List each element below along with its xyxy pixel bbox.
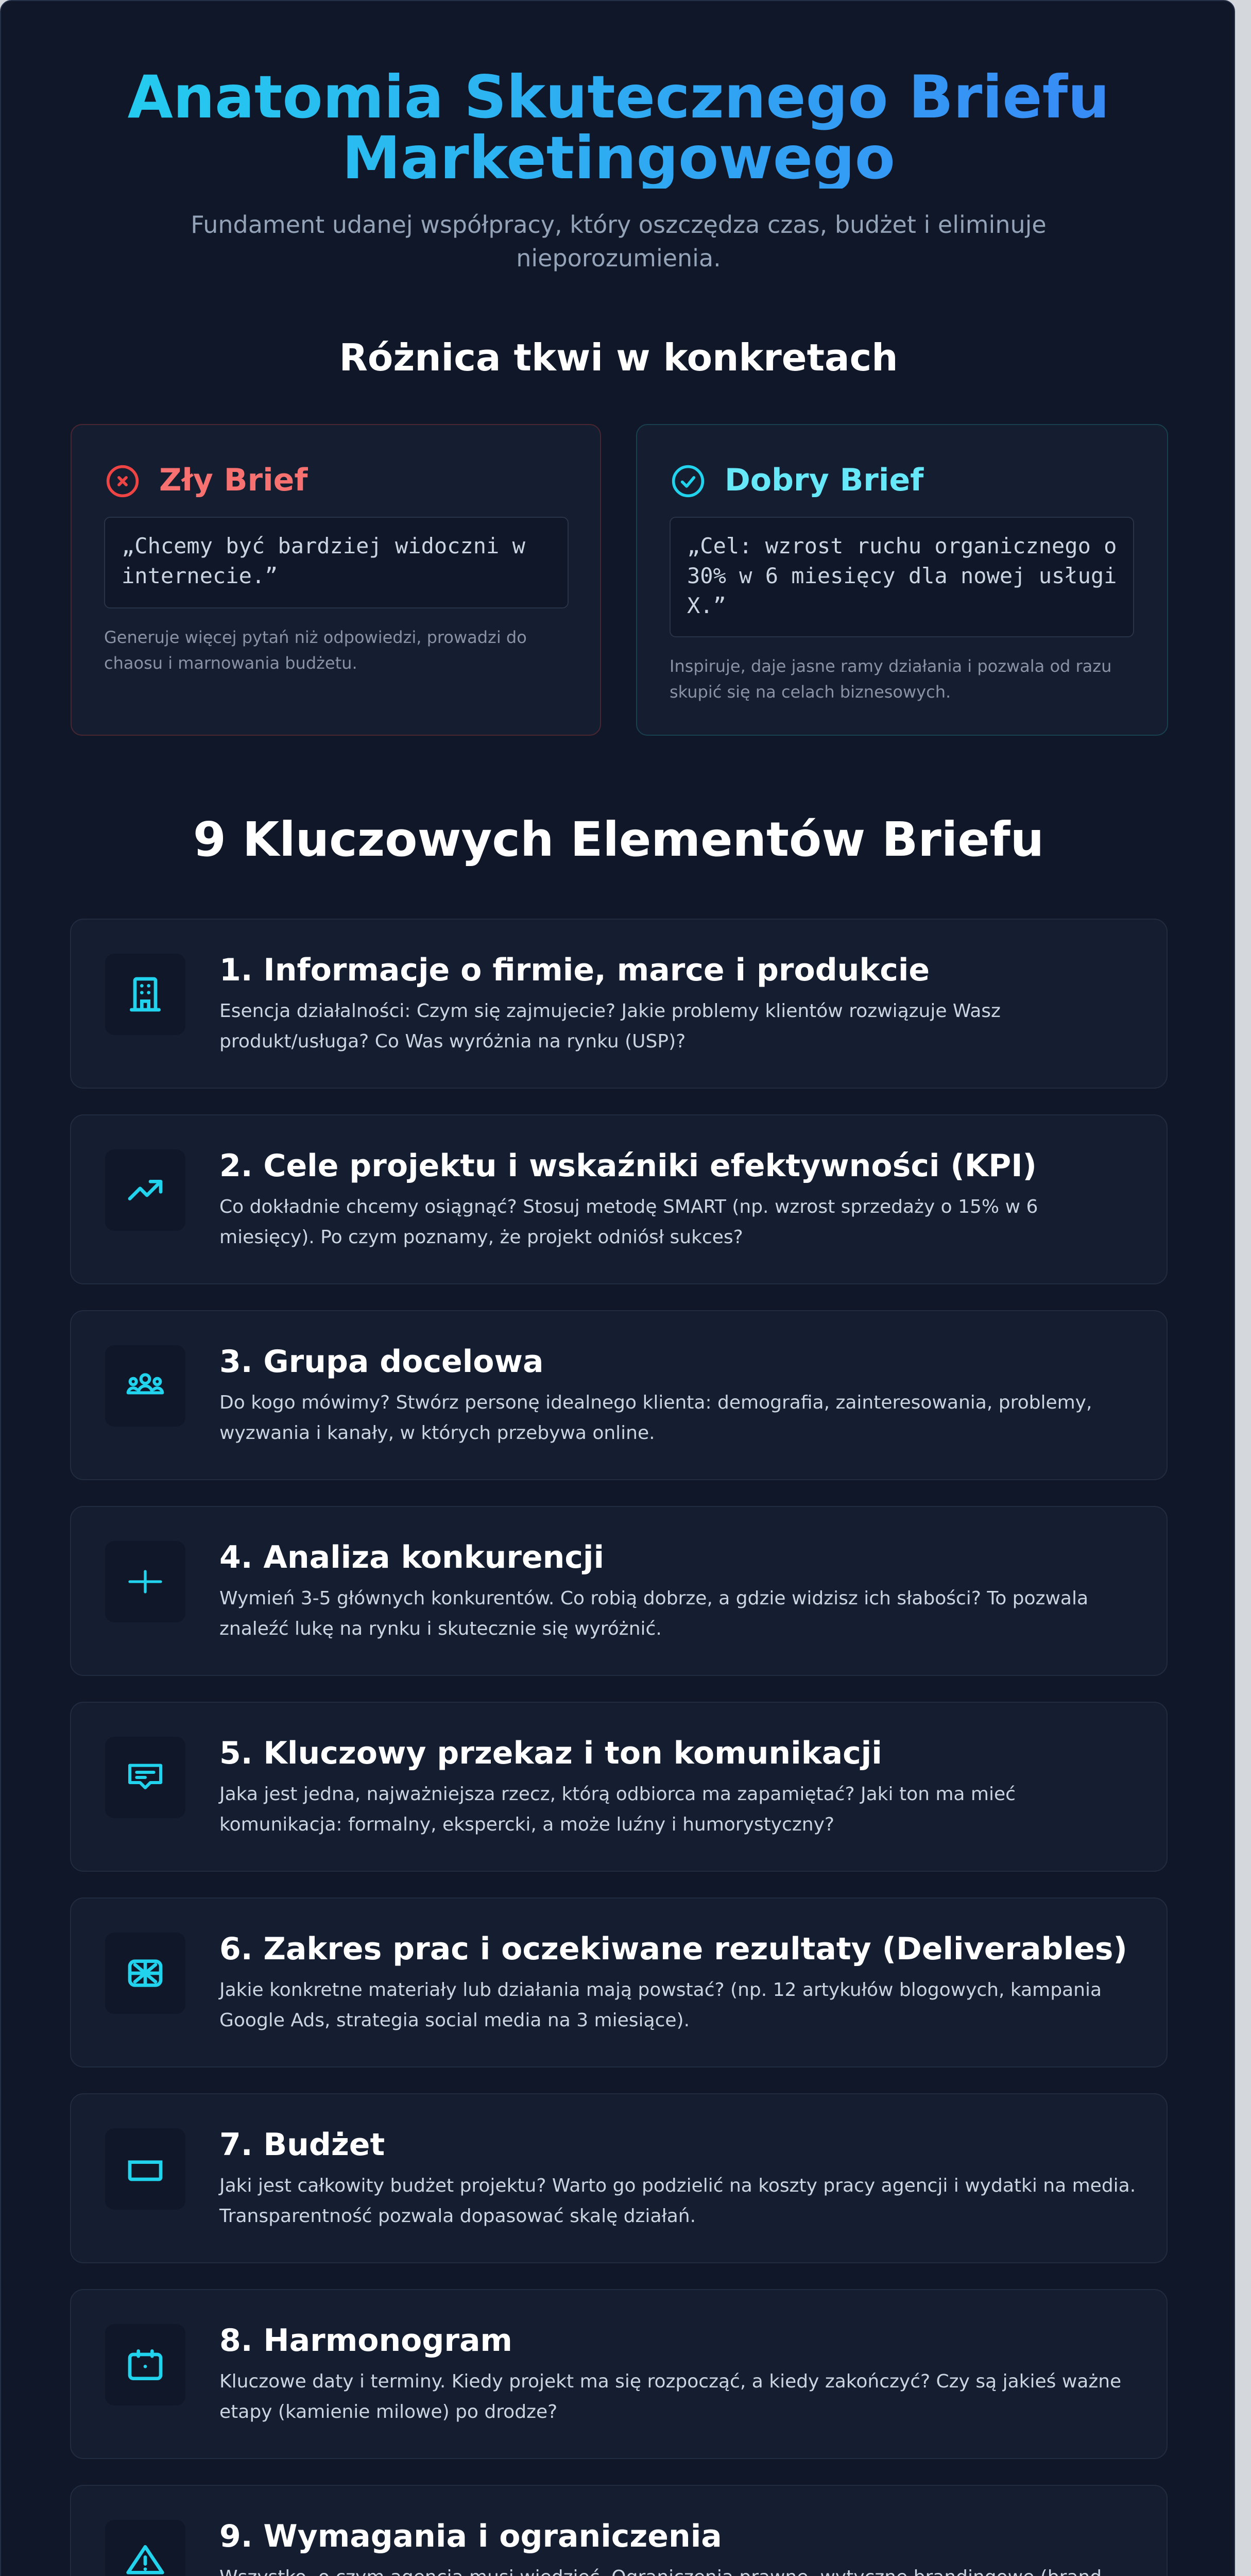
quote: good: „Cel: wzrost ruchu organicznego o	[687, 533, 1117, 558]
text: bad description: Generuje więcej pytań niż odpowiedzi, prowadzi do	[104, 628, 527, 647]
icon: check circle	[672, 465, 705, 498]
card 8: Kluczowe daty i terminy. Kiedy projekt ma się rozpocząć, a kiedy zakończyć? Czy są jakieś ważne	[219, 2371, 1121, 2392]
text: bad description: chaosu i marnowania budżetu.	[104, 653, 357, 673]
quote: good: X.”	[687, 593, 726, 618]
card 9	[70, 2485, 1168, 2576]
text: good description: Inspiruje, daje jasne ramy działania i pozwala od razu	[670, 656, 1111, 676]
card 4	[70, 1506, 1168, 1676]
card 9: 9. Wymagania i ograniczenia	[219, 2518, 722, 2554]
icon: package	[105, 1933, 185, 2014]
card 1: 1. Informacje o firmie, marce i produkcie	[219, 952, 930, 988]
card 1	[70, 919, 1168, 1089]
icon: x circle	[106, 465, 139, 498]
icon: message	[105, 1737, 185, 1818]
subtitle	[191, 211, 1047, 272]
icon: trend	[105, 1149, 185, 1231]
text: good description	[670, 656, 1111, 702]
heading: comparison: Różnica tkwi w konkretach	[339, 336, 898, 379]
heading: bad: Zły Brief	[159, 462, 307, 498]
text: good description: skupić się na celach biznesowych.	[670, 682, 951, 702]
icon: wallet	[105, 2128, 185, 2210]
icon: people	[105, 1345, 185, 1427]
card 5: Jaka jest jedna, najważniejsza rzecz, którą odbiorca ma zapamiętać? Jaki ton ma mieć	[219, 1784, 1016, 1805]
icon: plus	[105, 1541, 185, 1622]
card 3: Do kogo mówimy? Stwórz personę idealnego klienta: demografia, zainteresowania, problemy,	[219, 1392, 1092, 1413]
card 8: etapy (kamienie milowe) po drodze?	[219, 2401, 557, 2422]
card 2: Co dokładnie chcemy osiągnąć? Stosuj metodę SMART (np. wzrost sprzedaży o 15% w 6	[219, 1196, 1038, 1217]
subtitle: nieporozumienia.	[516, 244, 721, 272]
card 3: wyzwania i kanały, w których przebywa online.	[219, 1422, 655, 1444]
card 7	[70, 2093, 1168, 2263]
card 5	[70, 1702, 1168, 1872]
panel: good brief	[636, 424, 1168, 736]
card 1: Esencja działalności: Czym się zajmujecie? Jakie problemy klientów rozwiązuje Wasz	[219, 1001, 1001, 1022]
heading: 9 elements: 9 Kluczowych Elementów Briefu	[193, 812, 1044, 867]
card 6	[70, 1897, 1168, 2067]
card 4: Wymień 3-5 głównych konkurentów. Co robią dobrze, a gdzie widzisz ich słabości? To pozwala	[219, 1588, 1088, 1609]
title: Marketingowego	[342, 124, 895, 192]
quote: bad	[104, 517, 569, 608]
card 3	[70, 1310, 1168, 1480]
card 3: 3. Grupa docelowa	[219, 1344, 543, 1380]
quote: good	[670, 517, 1134, 637]
card 7: 7. Budżet	[219, 2127, 385, 2163]
card 8: 8. Harmonogram	[219, 2323, 512, 2359]
card 5: komunikacja: formalny, ekspercki, a może luźny i humorystyczny?	[219, 1814, 834, 1835]
card 2: 2. Cele projektu i wskaźniki efektywności (KPI)	[219, 1148, 1037, 1184]
card 8	[70, 2289, 1168, 2459]
card 7: Jaki jest całkowity budżet projektu? Warto go podzielić na koszty pracy agencji i wydatki na media.	[219, 2175, 1136, 2196]
card 2	[70, 1114, 1168, 1284]
quote: bad: „Chcemy być bardziej widoczni w	[122, 533, 525, 558]
panel: bad brief	[71, 424, 601, 736]
card 1: produkt/usługa? Co Was wyróżnia na rynku (USP)?	[219, 1031, 686, 1052]
card 2: miesięcy). Po czym poznamy, że projekt odniósł sukces?	[219, 1227, 743, 1248]
title	[1, 67, 1236, 189]
icon: warning	[105, 2520, 185, 2576]
card 6: Google Ads, strategia social media na 3 miesiące).	[219, 2010, 690, 2031]
quote: good: 30% w 6 miesięcy dla nowej usługi	[687, 563, 1117, 588]
card 6: Jakie konkretne materiały lub działania mają powstać? (np. 12 artykułów blogowych, kampania	[219, 1979, 1102, 2001]
icon: building	[105, 954, 185, 1035]
card 6: 6. Zakres prac i oczekiwane rezultaty (Deliverables)	[219, 1931, 1127, 1967]
subtitle: Fundament udanej współpracy, który oszczędza czas, budżet i eliminuje	[191, 211, 1047, 239]
card 4: znaleźć lukę na rynku i skutecznie się wyróżnić.	[219, 1618, 662, 1639]
quote: bad: internecie.”	[122, 563, 278, 588]
text: bad description	[104, 628, 527, 673]
icon: calendar	[105, 2324, 185, 2405]
heading: good: Dobry Brief	[725, 462, 923, 498]
card 4: 4. Analiza konkurencji	[219, 1539, 604, 1575]
title: Anatomia Skutecznego Briefu	[128, 63, 1109, 131]
card 5: 5. Kluczowy przekaz i ton komunikacji	[219, 1735, 882, 1771]
card 7: Transparentność pozwala dopasować skalę działań.	[219, 2206, 696, 2227]
